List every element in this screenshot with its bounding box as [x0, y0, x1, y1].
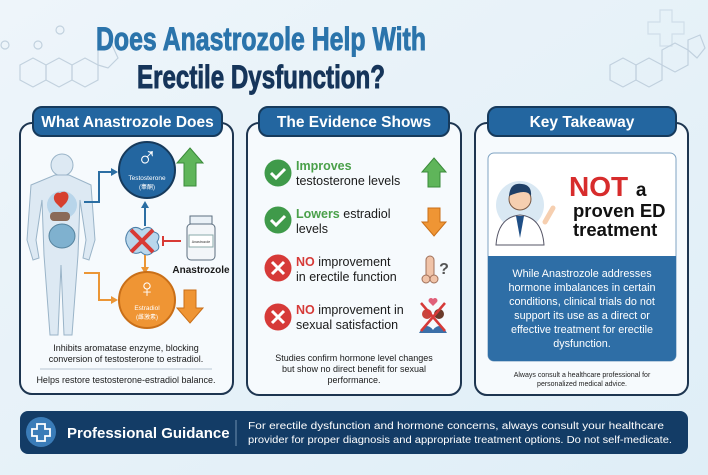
icon: estradiol circle: Estradiol [134, 305, 160, 312]
callout: explanation: effective treatment for erectile [511, 324, 653, 336]
text: guidance: For erectile dysfunction and hormone concerns, always consult your healthcare [248, 421, 665, 432]
text: guidance [248, 421, 672, 446]
icon: human body [27, 154, 95, 335]
decoration: steroid molecule left [1, 26, 118, 87]
item: no satisfaction improvement: NO improvement in [296, 303, 404, 317]
text: evidence summary: but show no direct benefit for sexual [282, 364, 426, 374]
text: disclaimer [514, 372, 651, 388]
text: evidence summary: performance. [327, 375, 381, 385]
icon: testosterone circle: ♂ [136, 142, 158, 173]
title [96, 21, 426, 95]
text: disclaimer: personalized medical advice. [537, 381, 627, 388]
item: lowers estradiol: Lowers estradiol [296, 207, 390, 221]
item: no satisfaction improvement: sexual satisfaction [296, 318, 398, 332]
label: anastrozole: Anastrozole [172, 265, 230, 276]
icon: anastrozole bottle [187, 216, 215, 260]
icon: estradiol circle: ♀ [137, 273, 157, 303]
item: no erectile improvement [264, 254, 449, 284]
heading: key takeaway: Key Takeaway [530, 114, 635, 131]
card: not proven [488, 153, 676, 361]
callout: explanation [488, 256, 676, 361]
icon: green up arrow [177, 148, 203, 186]
item: improves testosterone [264, 158, 446, 188]
icon: estradiol circle [119, 272, 175, 328]
panel: key takeaway [475, 107, 688, 395]
panel: the evidence shows [247, 107, 461, 395]
icon: doctor [496, 181, 553, 245]
banner: professional guidance [20, 411, 688, 454]
card: not proven: proven ED [573, 200, 666, 221]
text: mechanism: conversion of testosterone to estradiol. [49, 354, 203, 364]
heading: the evidence shows: The Evidence Shows [277, 114, 431, 131]
title: Does Anastrozole Help With [96, 21, 426, 57]
heading: what anastrozole does: What Anastrozole Does [41, 114, 214, 131]
item: lowers estradiol [264, 206, 446, 236]
callout: explanation: conditions, clinical trials do not [509, 296, 655, 308]
text: evidence summary: Studies confirm hormone level changes [275, 353, 433, 363]
arrow: body to testosterone [84, 172, 113, 202]
icon: testosterone circle [119, 142, 175, 198]
item: no erectile improvement: ? [439, 261, 449, 278]
callout: explanation: support its use as a direct or [514, 310, 650, 322]
icon: estradiol circle: (雌激素) [136, 313, 158, 321]
callout: explanation: While Anastrozole addresses [512, 268, 652, 280]
text: mechanism: Inhibits aromatase enzyme, blocking [53, 343, 199, 353]
text: mechanism [36, 343, 216, 385]
callout: explanation: dysfunction. [553, 338, 611, 350]
item: no erectile improvement: in erectile function [296, 270, 397, 284]
item: no satisfaction improvement [264, 298, 447, 333]
icon: orange down arrow [177, 290, 203, 323]
arrow: body to estradiol [84, 273, 113, 300]
item: no erectile improvement: NO improvement [296, 255, 391, 269]
icon: testosterone circle: (睾酮) [139, 183, 155, 191]
text: mechanism: Helps restore testosterone-estradiol balance. [36, 375, 216, 385]
icon: testosterone circle: Testosterone [128, 175, 166, 182]
icon: aromatase enzyme blocked [126, 201, 181, 274]
icon: anastrozole bottle: Anastrozole [192, 240, 210, 244]
card: not proven: treatment [573, 219, 657, 240]
heading: the evidence shows [259, 107, 449, 136]
item: improves testosterone: Improves [296, 159, 352, 173]
callout: explanation: hormone imbalances in certain [508, 282, 656, 294]
item: improves testosterone: testosterone levels [296, 174, 400, 188]
text: disclaimer: Always consult a healthcare professional for [514, 372, 651, 379]
decoration: steroid molecule right [610, 10, 705, 87]
text: guidance: provider for proper diagnosis and appropriate treatment options. Do not self-medicate. [248, 435, 672, 446]
text: evidence summary [275, 353, 433, 385]
heading: key takeaway [488, 107, 676, 136]
heading: what anastrozole does [33, 107, 222, 136]
card: not proven: NOT a [569, 171, 647, 202]
banner: professional guidance: Professional Guidance [67, 425, 230, 442]
icon: medical cross [26, 417, 56, 447]
title: Erectile Dysfunction? [137, 59, 385, 95]
panel: what anastrozole does [20, 107, 233, 394]
item: lowers estradiol: levels [296, 222, 328, 236]
